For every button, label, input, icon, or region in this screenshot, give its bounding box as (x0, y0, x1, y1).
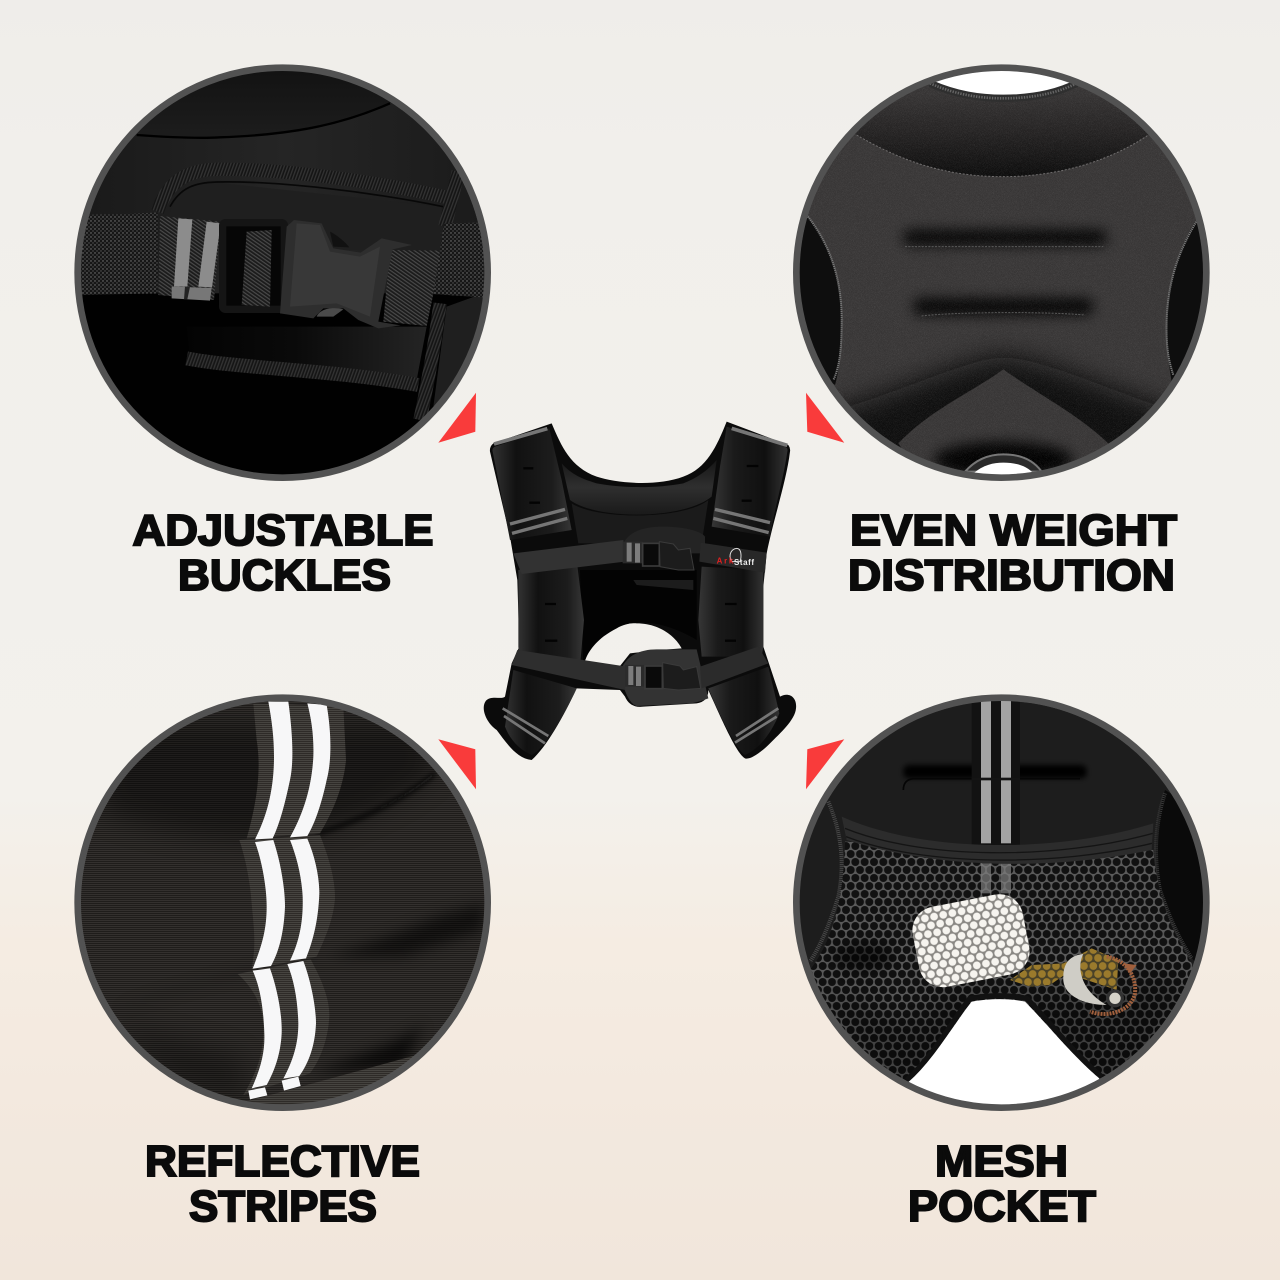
chevron (842, 345, 1162, 448)
pointer: top right (806, 393, 844, 443)
inner pad (170, 183, 443, 250)
bottom left panel (505, 670, 577, 755)
lower opening (965, 454, 1042, 472)
heading: adjustable buckles (132, 506, 434, 600)
pointer: bottom left (438, 739, 476, 789)
earbud case (912, 894, 1030, 988)
heading: mesh pocket (908, 1137, 1096, 1231)
heading: adjustable buckles: BUCKLES (178, 551, 391, 600)
center back (562, 460, 717, 667)
fabric noise (808, 86, 1195, 470)
lower pad (620, 649, 708, 706)
heading: even weight distribution: DISTRIBUTION (848, 551, 1175, 600)
heading: reflective stripes: STRIPES (189, 1182, 377, 1231)
panel: mesh pocket (790, 690, 1220, 1123)
ring (796, 68, 1206, 478)
stripes behind mesh (981, 863, 991, 893)
lower left panel (518, 560, 584, 667)
side panels (800, 216, 842, 385)
heading: reflective stripes: REFLECTIVE (145, 1137, 420, 1186)
upper left panel (492, 428, 572, 540)
groove in neoprene (903, 765, 1087, 778)
elastic band (842, 817, 1153, 864)
left strap (80, 213, 158, 295)
grooves (903, 230, 1107, 245)
bottom right panel (708, 667, 779, 755)
webbing (247, 703, 346, 838)
ring (796, 698, 1206, 1108)
panel: adjustable buckles (70, 60, 500, 493)
slider frame (223, 223, 284, 309)
right strap (383, 223, 483, 326)
webbing (972, 700, 1020, 847)
shoulder band (856, 102, 1148, 177)
panel: even weight distribution (790, 60, 1220, 493)
lower piping (187, 358, 418, 385)
pointer: top left (438, 393, 476, 443)
ring (78, 68, 488, 478)
heading: even weight distribution (848, 506, 1177, 600)
mesh (811, 842, 1192, 1082)
vertical seam (420, 172, 458, 420)
buckle (280, 220, 412, 328)
brand logo: Ark (717, 556, 734, 565)
lower buckle (625, 663, 701, 690)
central vest product (484, 422, 796, 760)
brand logo: Staff (734, 558, 754, 567)
upper right strap (699, 543, 767, 573)
heading: reflective stripes (145, 1137, 420, 1231)
upper piping (157, 169, 447, 212)
panel: reflective stripes (70, 690, 500, 1123)
lower black area (82, 293, 474, 474)
lower strap left (512, 650, 627, 690)
upper right panel (712, 427, 788, 537)
bottom strip (248, 1056, 414, 1104)
panel tacks (523, 466, 758, 641)
keys (1010, 948, 1137, 1014)
reflective label (158, 216, 221, 301)
lower right panel (698, 567, 763, 657)
heading: mesh pocket: POCKET (908, 1182, 1096, 1231)
reflective stripes (248, 702, 330, 1099)
upper buckle (623, 542, 694, 570)
heading: adjustable buckles: ADJUSTABLE (132, 506, 434, 555)
pointer: bottom right (806, 739, 844, 789)
reflective bands (494, 428, 787, 743)
heading: mesh pocket: MESH (935, 1137, 1068, 1186)
ring (78, 698, 488, 1108)
side panels (802, 810, 822, 867)
vest silhouette (484, 422, 796, 760)
brand logo (717, 548, 754, 567)
white opening (908, 999, 1100, 1104)
heading: even weight distribution: EVEN WEIGHT (850, 506, 1177, 555)
upper strap (513, 540, 625, 574)
neck opening (936, 71, 1070, 95)
fold shadows (100, 723, 433, 840)
lower strap right (700, 647, 768, 688)
neck fold (158, 71, 391, 132)
